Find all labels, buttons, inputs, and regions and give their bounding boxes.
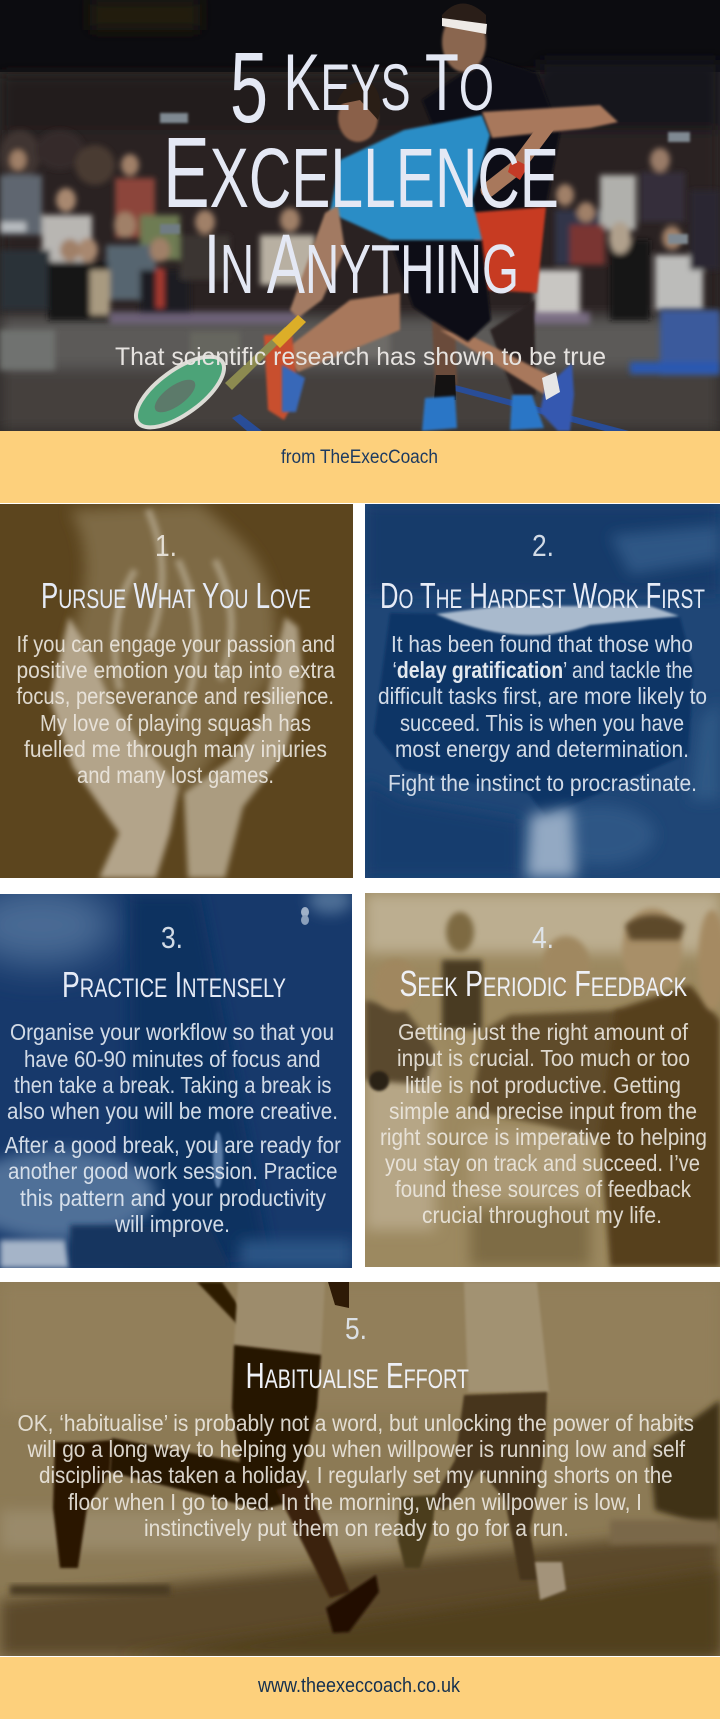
body text: then take a break. Taking a break is (14, 1072, 332, 1098)
body text: My love of playing squash has (40, 710, 311, 736)
body text: crucial throughout my life. (422, 1202, 662, 1228)
racket (134, 354, 226, 430)
top banner (0, 431, 720, 503)
title: K (268, 38, 320, 128)
number: 5. (345, 1311, 367, 1346)
body text: will improve. (114, 1211, 230, 1237)
website: www.theexeccoach.co.uk (257, 1675, 461, 1697)
body text (5, 1019, 341, 1237)
image: runners on a beach (0, 1282, 720, 1656)
number: 1. (155, 528, 177, 563)
body text: It has been found that those who (391, 631, 693, 657)
heading: DO THE HARDEST WORK FIRST (380, 575, 705, 616)
body text: focus, perseverance and resilience. (16, 683, 334, 709)
body text: positive emotion you tap into extra (16, 657, 335, 683)
body text: After a good break, you are ready for (5, 1132, 341, 1158)
body text: Organise your workflow so that you (10, 1019, 334, 1045)
body text (380, 1019, 707, 1228)
body text: floor when I go to bed. In the morning, when willpower is low, I (68, 1489, 642, 1515)
body text: most energy and determination. (395, 736, 689, 762)
body text (378, 631, 707, 796)
byline: from TheExecCoach (281, 447, 438, 468)
body text: another good work session. Practice (8, 1158, 338, 1184)
body text: Fight the instinct to procrastinate. (388, 770, 697, 796)
panel 3: practice intensely (0, 885, 352, 1268)
image: hands and flame (50, 504, 303, 878)
image: colleagues in a meeting (365, 893, 720, 1267)
runner right (398, 1282, 566, 1600)
number: 3. (161, 920, 183, 955)
title: 5 (230, 32, 268, 144)
number: 4. (532, 920, 554, 955)
title: EXCELLENCE (163, 117, 559, 229)
title: IN ANYTHING (204, 217, 519, 311)
number: 2. (532, 528, 554, 563)
body text: found these sources of feedback (395, 1176, 691, 1202)
body text: fuelled me through many injuries (24, 736, 327, 762)
heading: HABITUALISE EFFORT (246, 1355, 469, 1396)
body text: simple and precise input from the (389, 1098, 697, 1124)
title (163, 32, 559, 311)
heading: SEEK PERIODIC FEEDBACK (400, 963, 687, 1004)
player: front (225, 81, 618, 431)
panel 2: do the hardest work first (365, 504, 720, 878)
body text: and many lost games. (77, 762, 274, 788)
court floor lines (232, 385, 629, 431)
body text: succeed. This is when you have (400, 710, 684, 736)
image: running shorts on floor (365, 504, 720, 878)
body text (16, 631, 335, 788)
panel 4: seek periodic feedback (365, 893, 720, 1267)
panel 5: habitualise effort (0, 1282, 720, 1656)
heading: PRACTICE INTENSELY (62, 964, 286, 1005)
body text: this pattern and your productivity (20, 1185, 326, 1211)
heading: PURSUE WHAT YOU LOVE (41, 575, 311, 616)
subtitle: That scientific research has shown to be true (115, 343, 606, 371)
body text: Getting just the right amount of (398, 1019, 689, 1045)
body text: little is not productive. Getting (405, 1072, 681, 1098)
runner left (53, 1282, 379, 1633)
hero photo: squash players (0, 0, 720, 440)
title: EYS TO (320, 38, 510, 128)
panel 1: pursue what you love (0, 504, 353, 878)
body text: input is crucial. Too much or too (397, 1045, 690, 1071)
body text: ‘delay gratification’ and tackle the (392, 657, 693, 683)
footer banner (0, 1657, 720, 1719)
body text (18, 1410, 694, 1541)
body text: have 60-90 minutes of focus and (24, 1046, 320, 1072)
player: rear (422, 4, 560, 431)
body text: also when you will be more creative. (7, 1098, 338, 1124)
body text: instinctively put them on ready to go for a run. (144, 1515, 569, 1541)
body text: If you can engage your passion and (16, 631, 335, 657)
image: hands on keyboard (0, 885, 352, 1268)
